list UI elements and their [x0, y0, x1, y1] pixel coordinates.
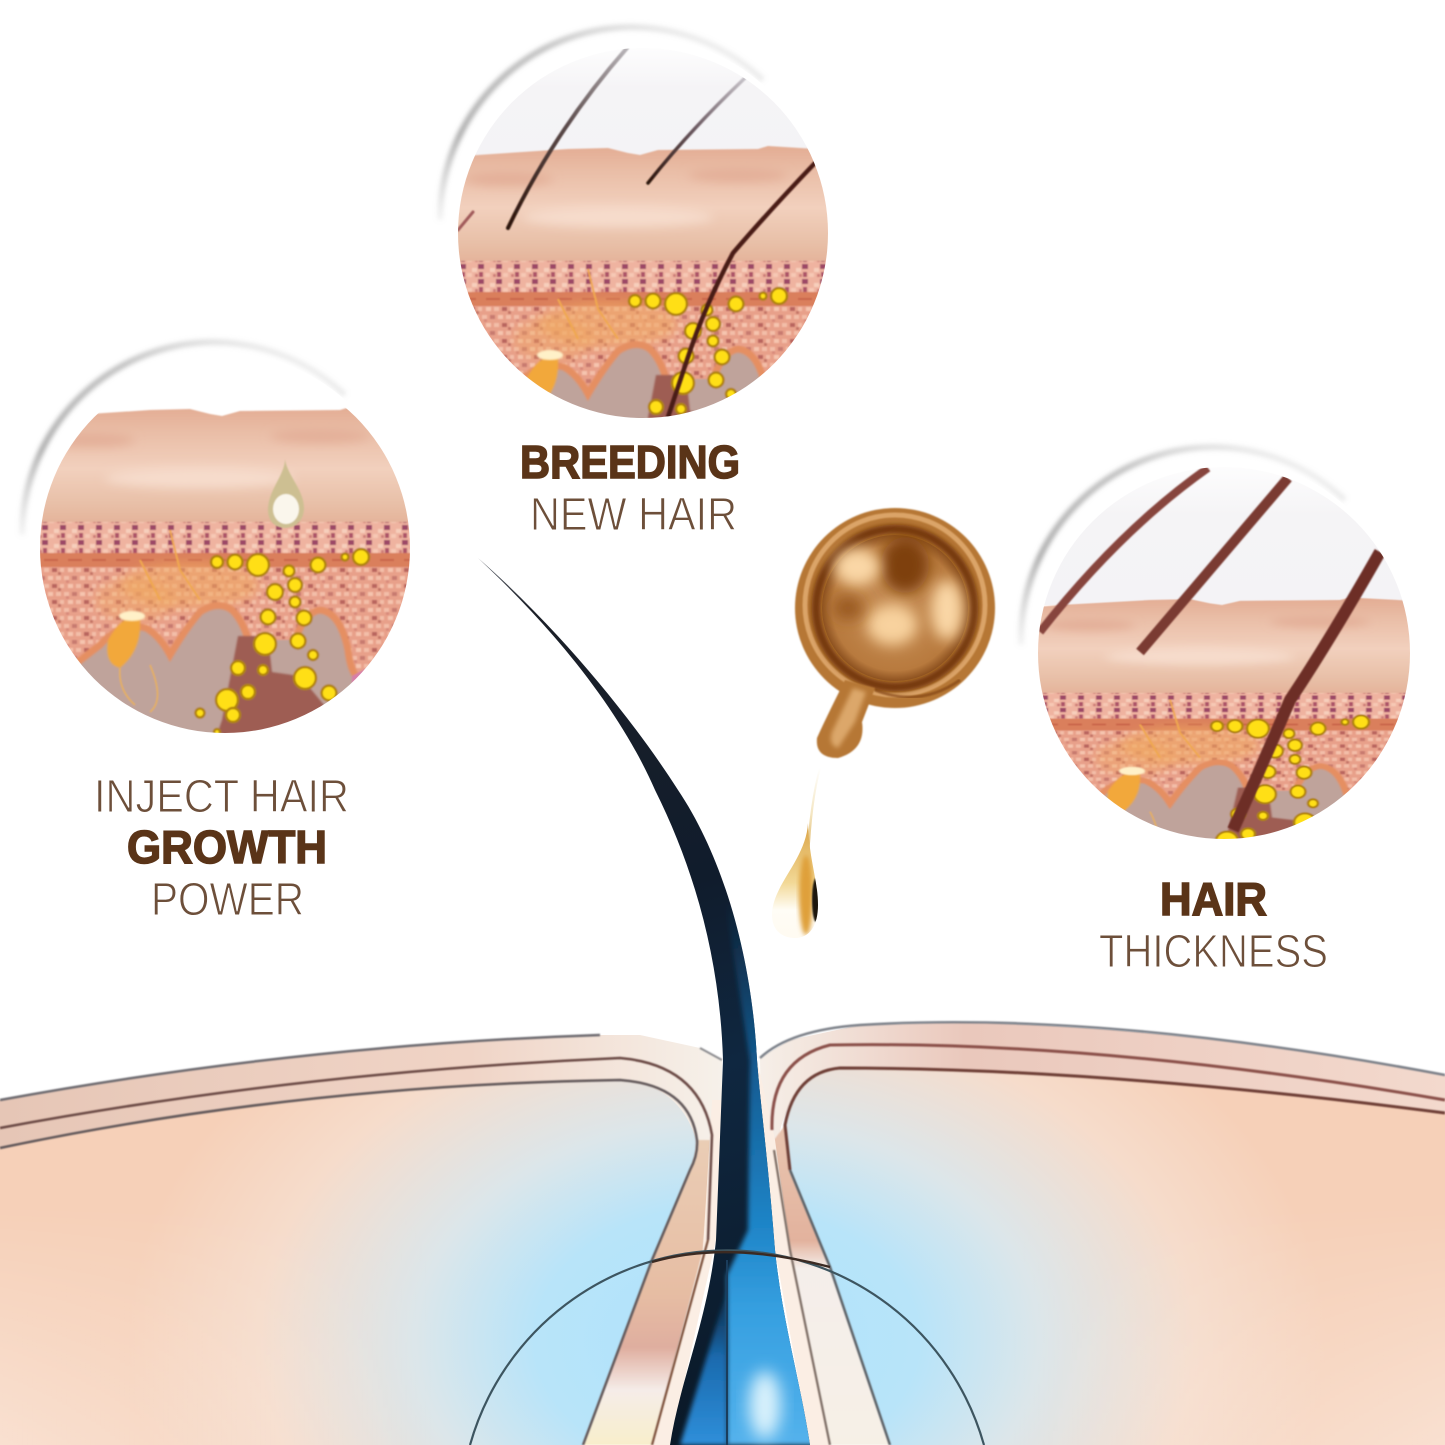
hairs: fine new hair [458, 48, 815, 420]
scalp tissue fill right [784, 1068, 1445, 1445]
bulb circle and center line [470, 1250, 984, 1445]
follicle sheath left [583, 1140, 712, 1445]
lower fade of scalp tissue [0, 1286, 1445, 1445]
heading: inject hair growth power: POWER [151, 873, 304, 925]
follicle sheath right [774, 1125, 890, 1445]
capsule stem [817, 680, 875, 758]
skin layers right [760, 1022, 1445, 1200]
heading: hair thickness: THICKNESS [1099, 925, 1328, 977]
heading: hair thickness: HAIR [1160, 873, 1267, 925]
panel: hair thickness circle [1018, 442, 1410, 839]
panel: inject hair growth circle [19, 338, 410, 733]
heading: breeding new hair: BREEDING [520, 436, 740, 488]
heading: inject hair growth power: GROWTH [127, 821, 327, 873]
heading: breeding new hair: NEW HAIR [530, 488, 737, 540]
icon: oil drop [772, 774, 819, 938]
heading: hair thickness [1099, 873, 1328, 977]
scalp tissue fill left [0, 1080, 696, 1445]
heading: breeding new hair [520, 436, 740, 540]
inner sheath [652, 1060, 830, 1445]
heading: inject hair growth power: INJECT HAIR [94, 770, 349, 822]
hairs: thick hair [1040, 468, 1380, 830]
hair shaft and bulb [470, 550, 830, 1445]
heading: inject hair growth power [94, 770, 349, 925]
panel: breeding new hair circle [437, 22, 828, 418]
skin layers left [0, 1035, 722, 1200]
icon: golden serum capsule [795, 508, 995, 758]
scalp outlines [0, 1022, 1445, 1445]
panel: scalp cross-section [0, 550, 1445, 1445]
icon: serum droplet in skin [268, 459, 304, 528]
